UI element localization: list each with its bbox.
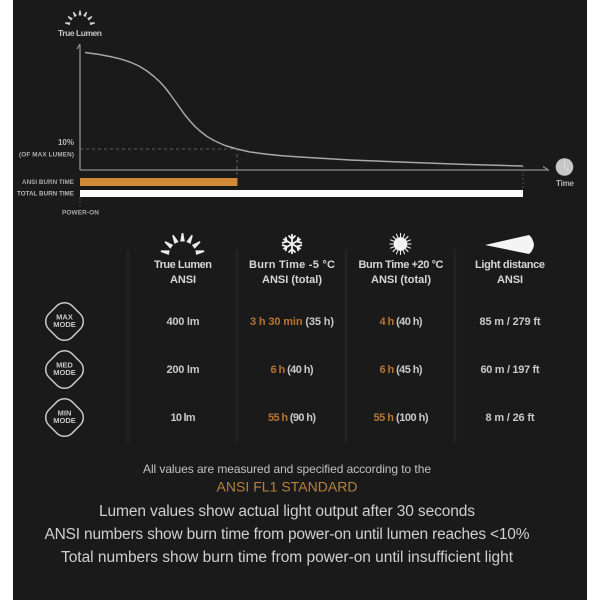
badge: max mode: MODE: [53, 320, 76, 329]
row: min mode values: [170, 412, 535, 424]
row: min mode values: 8 m / 26 ft: [486, 412, 535, 424]
badge: med mode: MODE: [53, 368, 76, 377]
icon: true lumen small: [65, 10, 95, 25]
icon: true lumen header: [160, 233, 205, 255]
row: med mode values: 60 m / 197 ft: [480, 364, 540, 376]
row: med mode values: 200 lm: [166, 364, 200, 376]
header: burn time cold: [249, 259, 335, 286]
label: true lumen axis: True Lumen: [58, 28, 102, 38]
label: total burn time: TOTAL BURN TIME: [17, 191, 74, 198]
y axis: [77, 44, 80, 170]
row: min mode values: 10 lm: [170, 412, 196, 424]
standard name: ANSI FL1 STANDARD: [216, 478, 358, 494]
header: true lumen: [154, 259, 212, 286]
row: max mode values: [166, 316, 541, 328]
row: min mode values: 55 h (100 h): [374, 412, 429, 424]
end guide: [522, 166, 524, 190]
footnote lines: Total numbers show burn time from power-on until insufficient light: [61, 549, 514, 566]
label: time: Time: [556, 179, 575, 188]
label: ten percent: 10%: [58, 138, 74, 147]
badge: min mode: MODE: [53, 416, 76, 425]
ten percent dashed guide: [80, 149, 237, 178]
footnote lines: ANSI numbers show burn time from power-on until lumen reaches <10%: [44, 526, 530, 543]
row: med mode values: 6 h (45 h): [380, 364, 423, 376]
row: med mode values: 6 h (40 h): [270, 364, 314, 376]
header: burn time cold: ANSI (total): [262, 274, 322, 286]
icon: clock: [556, 158, 573, 176]
line chart: [77, 44, 549, 206]
label: power-on: POWER-ON: [62, 210, 99, 216]
icon: light beam: [485, 235, 534, 254]
row: max mode values: 400 lm: [166, 316, 200, 328]
header: burn time cold: Burn Time -5 °C: [249, 259, 335, 271]
header: light distance: Light distance: [475, 259, 545, 271]
table values: [166, 316, 541, 424]
footnote intro: All values are measured and specified according to the: [143, 462, 431, 476]
row: max mode values: 4 h (40 h): [380, 316, 423, 328]
badge: max mode: [41, 298, 88, 345]
row: min mode values: 55 h (90 h): [268, 412, 316, 424]
header: true lumen: True Lumen: [154, 259, 212, 271]
x axis arrow: [80, 166, 549, 170]
bar: ansi burn time: [80, 178, 238, 186]
row: max mode values: 85 m / 279 ft: [480, 316, 541, 328]
header: light distance: [475, 259, 545, 286]
badge: med mode: [41, 346, 88, 393]
icon: sun: [390, 233, 412, 255]
badge: med mode: MED: [56, 360, 73, 370]
column headers: [154, 259, 545, 286]
badge: min mode: MIN: [58, 408, 71, 418]
label: ansi burn time: ANSI BURN TIME: [22, 179, 74, 186]
header: light distance: ANSI: [497, 274, 523, 286]
footnote lines: [44, 503, 530, 566]
header: burn time warm: [358, 259, 444, 286]
header: burn time warm: Burn Time +20 °C: [358, 259, 444, 271]
row: max mode values: 3 h 30 min (35 h): [250, 316, 334, 328]
badge: min mode: [41, 394, 88, 441]
row: med mode values: [166, 364, 540, 376]
footnote lines: Lumen values show actual light output after 30 seconds: [99, 503, 475, 520]
burn curve: [85, 52, 523, 166]
icon: snowflake: [282, 234, 302, 254]
header: true lumen: ANSI: [170, 274, 196, 286]
badge: max mode: MAX: [56, 312, 73, 322]
power-on guide: [79, 197, 81, 206]
label: of max lumen: (OF MAX LUMEN): [19, 152, 74, 158]
header: burn time warm: ANSI (total): [371, 274, 431, 286]
table dividers: [128, 249, 455, 441]
bar: total burn time: [80, 190, 523, 197]
